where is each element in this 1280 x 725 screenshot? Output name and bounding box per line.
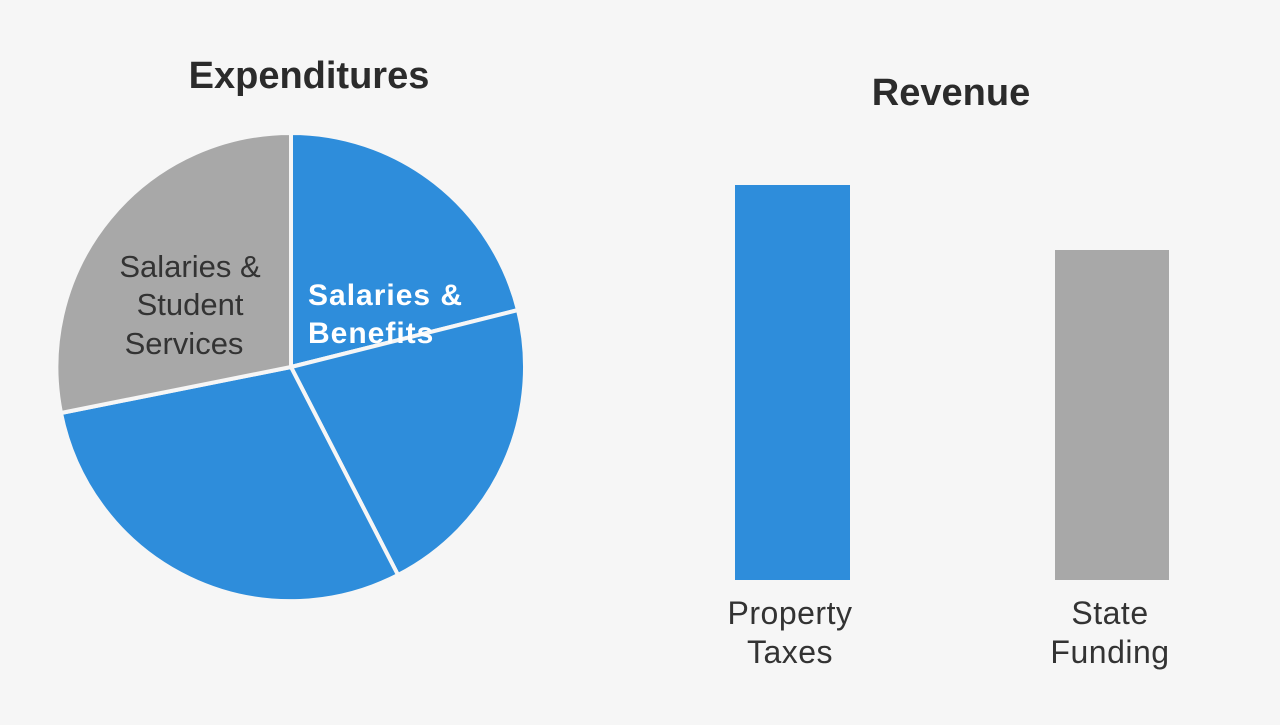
slice: right — [291, 310, 525, 575]
label: state funding: Funding — [1050, 634, 1170, 670]
slice: bottom — [61, 367, 398, 601]
pie label: blue slice: Salaries & — [308, 279, 463, 312]
bar: property taxes — [735, 185, 850, 580]
title: revenue: Revenue — [872, 72, 1030, 114]
pie label: gray slice: Salaries & — [119, 249, 261, 284]
slice: salaries & student services — [56, 133, 291, 413]
title: expenditures: Expenditures — [189, 55, 429, 97]
pie label: gray slice: Services — [125, 326, 243, 361]
pie label: gray slice: Student — [137, 287, 244, 322]
label: property taxes: Property — [728, 595, 852, 631]
slice: salaries & benefits — [291, 133, 518, 367]
label: property taxes: Taxes — [747, 634, 833, 670]
pie label: blue slice: Benefits — [308, 317, 434, 350]
label: state funding: State — [1071, 595, 1149, 631]
pie chart — [56, 133, 525, 601]
bar: state funding — [1055, 250, 1169, 580]
